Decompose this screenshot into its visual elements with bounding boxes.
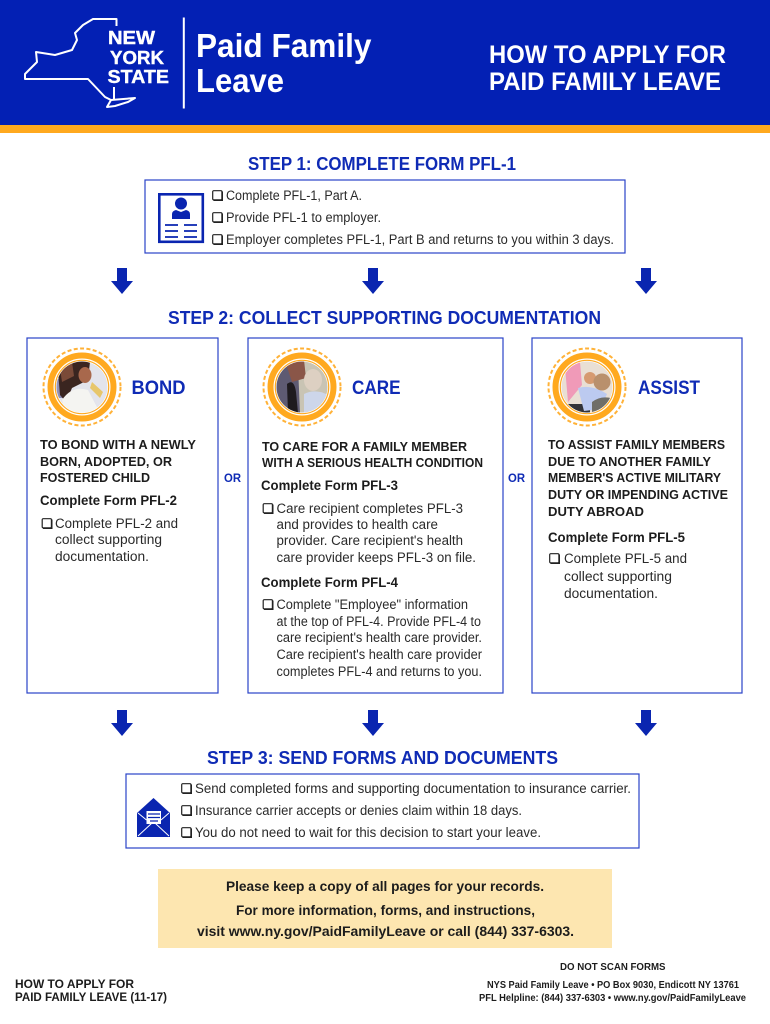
logo divider bbox=[183, 18, 185, 108]
panel: step 3 checklist: You do not need to wait for this decision to start your leave. bbox=[195, 825, 541, 840]
checklist: PFL-3 bbox=[263, 501, 476, 565]
checklist: Complete PFL-5 and bbox=[564, 551, 687, 566]
label: BOND bbox=[132, 378, 186, 399]
arrow: step 1 left bbox=[111, 268, 133, 294]
checklist bbox=[550, 551, 687, 601]
footer: form identifier bbox=[15, 979, 167, 1004]
checklist: PFL-3: Care recipient completes PFL-3 bbox=[276, 501, 463, 516]
footer: contact details: PFL Helpline: (844) 337-6303 • www.ny.gov/PaidFamilyLeave bbox=[479, 993, 746, 1004]
title: PAID FAMILY LEAVE bbox=[489, 68, 721, 96]
callout: keep a copy: visit www.ny.gov/PaidFamilyLeave or call (844) 337-6303. bbox=[197, 923, 574, 939]
checklist: PFL-4: Care recipient's health care provider bbox=[276, 647, 482, 662]
step 2 heading: STEP 2: COLLECT SUPPORTING DOCUMENTATION bbox=[168, 307, 601, 328]
checklist: collect supporting bbox=[55, 532, 162, 547]
title: HOW TO APPLY FOR bbox=[489, 41, 726, 69]
description: TO CARE FOR A FAMILY MEMBER bbox=[262, 439, 468, 454]
icon: open envelope bbox=[137, 798, 170, 837]
logo wordmark: STATE bbox=[108, 66, 169, 87]
checklist: documentation. bbox=[55, 549, 149, 564]
checklist: PFL-4: Complete "Employee" information bbox=[276, 597, 468, 612]
footer: form identifier: PAID FAMILY LEAVE (11-17) bbox=[15, 992, 167, 1004]
callout: keep a copy: Please keep a copy of all pages for your records. bbox=[226, 878, 544, 894]
checklist: PFL-4: at the top of PFL-4. Provide PFL-4 to bbox=[276, 614, 481, 629]
checklist: PFL-4: completes PFL-4 and returns to you. bbox=[276, 664, 482, 679]
callout: keep a copy bbox=[158, 869, 612, 948]
description: FOSTERED CHILD bbox=[40, 470, 150, 485]
footer: contact details: NYS Paid Family Leave • PO Box 9030, Endicott NY 13761 bbox=[487, 980, 739, 991]
description: DUTY ABROAD bbox=[548, 504, 644, 519]
panel: step 1 checklist bbox=[145, 180, 625, 253]
panel: step 3 checklist: Send completed forms and supporting documentation to insurance carrier. bbox=[195, 781, 631, 796]
panel: assist bbox=[532, 338, 742, 693]
description: BORN, ADOPTED, OR bbox=[40, 454, 173, 469]
logo wordmark bbox=[108, 27, 169, 87]
checklist bbox=[42, 516, 178, 564]
label: ASSIST bbox=[638, 378, 700, 399]
label: CARE bbox=[352, 378, 400, 399]
footer: form identifier: HOW TO APPLY FOR bbox=[15, 979, 135, 991]
description bbox=[40, 437, 196, 485]
arrow: step 1 right bbox=[635, 268, 657, 294]
checklist: PFL-3: care provider keeps PFL-3 on file. bbox=[276, 550, 476, 565]
checklist: PFL-3: and provides to health care bbox=[276, 517, 438, 532]
callout: keep a copy: For more information, forms, and instructions, bbox=[236, 902, 535, 918]
or label: OR bbox=[508, 471, 525, 485]
checklist: PFL-4: care recipient's health care provider. bbox=[276, 630, 482, 645]
step 1 heading: STEP 1: COMPLETE FORM PFL-1 bbox=[248, 153, 516, 174]
checklist: documentation. bbox=[564, 586, 658, 601]
panel: step 3 checklist: Insurance carrier accepts or denies claim within 18 days. bbox=[195, 803, 522, 818]
checklist: collect supporting bbox=[564, 569, 672, 584]
arrow: step 1 centre bbox=[362, 268, 384, 294]
panel: step 1 checklist: Complete PFL-1, Part A. bbox=[226, 188, 362, 203]
panel: step 1 checklist: Employer completes PFL-1, Part B and returns to you within 3 days. bbox=[226, 232, 614, 247]
description: TO ASSIST FAMILY MEMBERS bbox=[548, 437, 725, 452]
arrow: step 2 left bbox=[111, 710, 133, 736]
icon: New York State outline bbox=[25, 19, 135, 107]
form heading: Complete Form PFL-2 bbox=[40, 493, 177, 508]
form heading: PFL-3: Complete Form PFL-3 bbox=[261, 478, 398, 493]
programme name: Leave bbox=[196, 62, 284, 99]
panel: step 1 checklist: Provide PFL-1 to employer. bbox=[226, 210, 381, 225]
footer: contact details: DO NOT SCAN FORMS bbox=[560, 962, 666, 973]
checklist: Complete PFL-2 and bbox=[55, 516, 178, 531]
form heading: PFL-4: Complete Form PFL-4 bbox=[261, 575, 398, 590]
checklist: PFL-3: provider. Care recipient's health bbox=[276, 533, 463, 548]
description bbox=[548, 437, 728, 519]
description: DUE TO ANOTHER FAMILY bbox=[548, 454, 711, 469]
icon: assist photo badge bbox=[548, 348, 626, 426]
description: MEMBER'S ACTIVE MILITARY bbox=[548, 470, 721, 485]
logo wordmark: NEW bbox=[108, 27, 156, 48]
panel: care bbox=[248, 338, 503, 693]
programme name: Paid Family bbox=[196, 27, 372, 64]
arrow: step 2 centre bbox=[362, 710, 384, 736]
icon: ID card bbox=[159, 194, 203, 242]
footer: contact details bbox=[479, 962, 746, 1004]
logo wordmark: YORK bbox=[110, 47, 165, 68]
description: TO BOND WITH A NEWLY bbox=[40, 437, 196, 452]
description: DUTY OR IMPENDING ACTIVE bbox=[548, 487, 728, 502]
panel: bond bbox=[27, 338, 218, 693]
form heading: Complete Form PFL-5 bbox=[548, 530, 685, 545]
description: WITH A SERIOUS HEALTH CONDITION bbox=[262, 455, 483, 470]
header banner bbox=[0, 0, 770, 133]
programme name bbox=[196, 27, 372, 99]
icon: bond photo badge bbox=[44, 348, 120, 426]
panel: step 3 checklist bbox=[126, 774, 639, 848]
title bbox=[489, 41, 726, 96]
arrow: step 2 right bbox=[635, 710, 657, 736]
checklist: PFL-4 bbox=[263, 597, 482, 679]
step 3 heading: STEP 3: SEND FORMS AND DOCUMENTS bbox=[207, 747, 558, 768]
or label: OR bbox=[224, 471, 241, 485]
description bbox=[262, 439, 483, 470]
icon: care photo badge bbox=[264, 348, 340, 426]
